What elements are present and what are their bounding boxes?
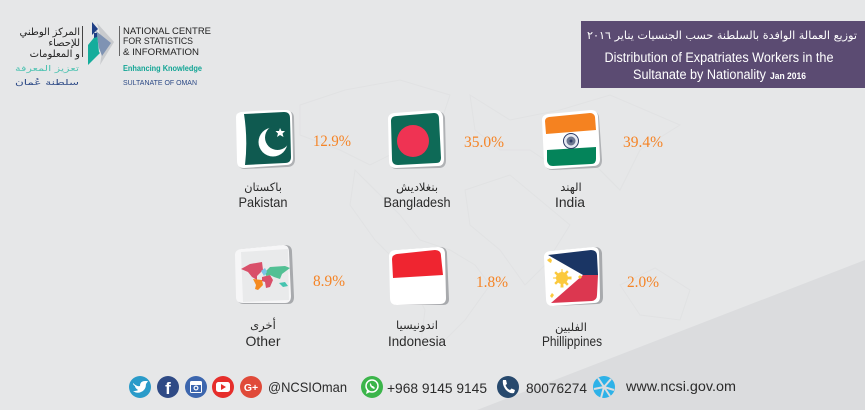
Philippines value: 2.0%	[627, 274, 659, 291]
phone number: 80076274	[526, 380, 587, 396]
Philippines label: Phillippines	[542, 333, 602, 349]
logo English name: FOR STATISTICS	[123, 35, 193, 46]
Pakistan Arabic label: باكستان	[244, 180, 282, 194]
logo Arabic name: للإحصاء	[48, 38, 80, 49]
logo tagline: Enhancing Knowledge	[123, 63, 202, 73]
logo Arabic name: المركز الوطني	[20, 27, 80, 38]
flag card: Philippines	[544, 247, 603, 306]
star	[276, 128, 285, 137]
Indonesia value: 1.8%	[476, 274, 508, 291]
sun	[547, 258, 582, 298]
India value: 39.4%	[623, 134, 663, 151]
logo Arabic country: سلطنة عُمان	[15, 78, 79, 87]
logo English name: & INFORMATION	[123, 46, 199, 57]
icon: facebook	[157, 376, 179, 398]
English subtitle: Sultanate by Nationality	[633, 67, 766, 82]
icon: youtube	[212, 376, 234, 398]
Other value: 8.9%	[313, 273, 345, 290]
flag card: Pakistan	[236, 110, 295, 169]
Bangladesh Arabic label: بنغلاديش	[396, 180, 438, 195]
icon: facebook: f	[165, 379, 171, 398]
logo country: SULTANATE OF OMAN	[123, 78, 197, 87]
icon: whatsapp	[361, 376, 383, 398]
Other Arabic label: أخرى	[250, 317, 276, 333]
icon: instagram	[185, 376, 207, 398]
phone number whatsapp: +968 9145 9145	[387, 380, 487, 396]
Other label: Other	[246, 333, 281, 349]
flag card: Indonesia	[389, 247, 449, 305]
icon: google plus	[240, 376, 262, 398]
Arabic title: توزيع العمالة الوافدة بالسلطنة حسب الجنسيات يناير ٢٠١٦	[587, 29, 857, 42]
India Arabic label: الهند	[560, 180, 582, 194]
Indonesia label: Indonesia	[388, 333, 446, 349]
icon: phone	[497, 376, 519, 398]
logo Arabic name: و المعلومات	[30, 49, 80, 60]
logo Arabic tagline: تعزيز المعرفة	[15, 64, 79, 73]
title date: Jan 2016	[770, 71, 806, 81]
Bangladesh value: 35.0%	[464, 134, 504, 151]
Pakistan label: Pakistan	[238, 194, 288, 210]
icon: google plus: G+	[244, 382, 258, 394]
flag card: India	[542, 110, 602, 170]
logo mark	[88, 22, 114, 65]
title panel	[581, 21, 865, 88]
Pakistan value: 12.9%	[313, 133, 351, 150]
icon: globe	[593, 376, 615, 398]
world map	[241, 262, 290, 290]
logo: NCSI	[15, 22, 211, 87]
crescent	[258, 125, 290, 156]
social handle: @NCSIOman	[268, 379, 347, 395]
icon: twitter	[129, 376, 151, 398]
chakra	[564, 134, 578, 148]
Philippines Arabic label: الفلبين	[555, 320, 587, 335]
logo English name: NATIONAL CENTRE	[123, 25, 211, 36]
logo English name	[123, 25, 211, 57]
website: www.ncsi.gov.om	[625, 378, 736, 394]
footer contact bar	[129, 376, 736, 398]
English title: Distribution of Expatriates Workers in the	[604, 50, 834, 65]
flag card: Bangladesh	[388, 110, 446, 169]
flag card: Other	[235, 245, 294, 304]
Bangladesh label: Bangladesh	[384, 194, 450, 210]
logo Arabic name	[20, 27, 80, 60]
India label: India	[555, 194, 585, 210]
Indonesia Arabic label: اندونيسيا	[396, 318, 438, 333]
